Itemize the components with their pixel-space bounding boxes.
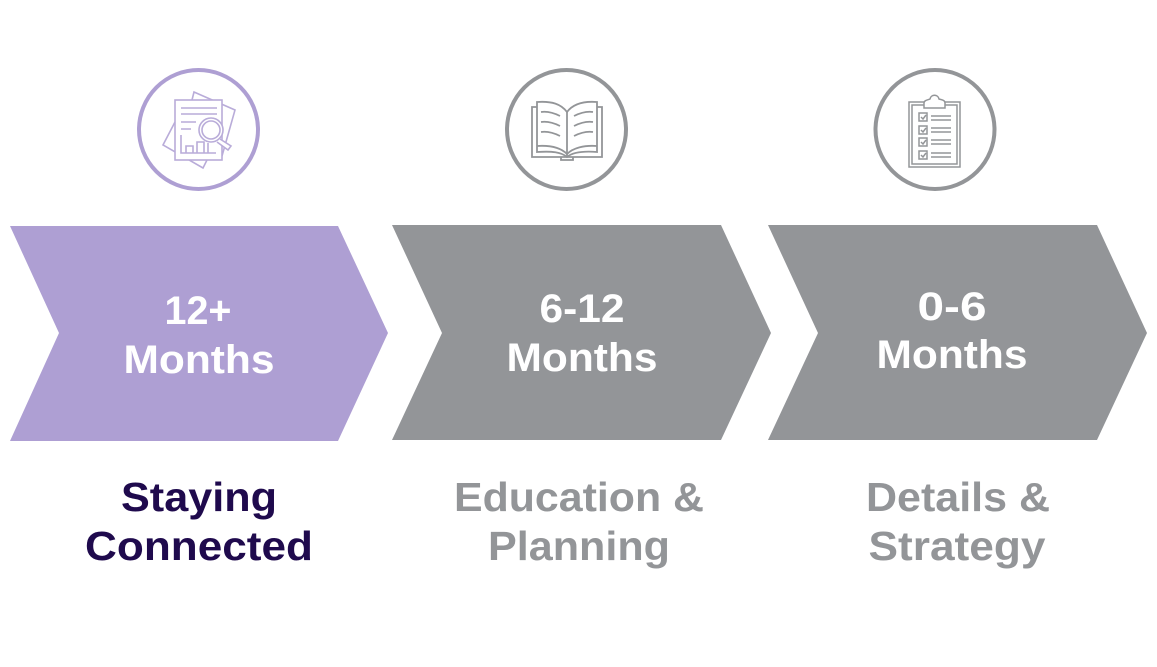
- chevron: 12+ months: Months: [124, 338, 274, 382]
- label: Staying Connected: [85, 474, 313, 569]
- chevron: 12+ months: [10, 226, 388, 441]
- label: Details & Strategy: Details &: [866, 474, 1050, 520]
- chevron: 6-12 months: [392, 225, 771, 440]
- chevron: 6-12 months: 6-12: [540, 287, 624, 331]
- label: Staying Connected: Connected: [85, 523, 313, 569]
- label: Education & Planning: [454, 474, 704, 569]
- label: Details & Strategy: [866, 474, 1050, 569]
- icon: open book: [507, 70, 626, 189]
- icon: report with magnifier: [139, 70, 258, 189]
- label: Education & Planning: Planning: [488, 523, 670, 569]
- label: Staying Connected: Staying: [121, 474, 277, 520]
- chevron: 0-6 months: [768, 225, 1147, 440]
- chevron: 6-12 months: Months: [506, 336, 658, 380]
- chevron: 0-6 months: Months: [876, 333, 1028, 377]
- chevron: 12+ months: 12+: [164, 289, 232, 333]
- icon: clipboard checklist: [876, 70, 994, 189]
- label: Details & Strategy: Strategy: [868, 523, 1046, 569]
- label: Education & Planning: Education &: [454, 474, 704, 520]
- chevron: 0-6 months: 0-6: [918, 285, 986, 329]
